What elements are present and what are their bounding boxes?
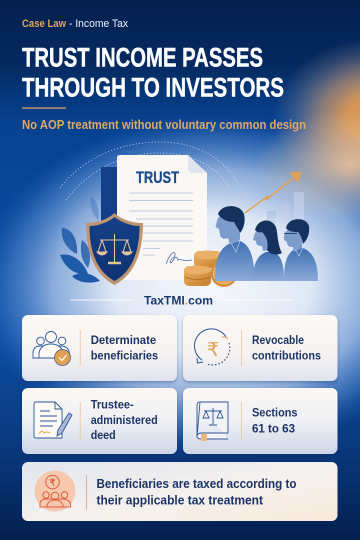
callout: tax treatment <box>22 462 338 521</box>
eyebrow: category label <box>22 18 128 30</box>
icon: rupee over group <box>34 470 76 512</box>
signature <box>166 252 192 264</box>
dotted arcs <box>60 142 238 200</box>
icon: coin stacks <box>184 250 238 287</box>
text: Revocable <box>252 333 304 347</box>
icon: law book <box>197 402 228 441</box>
icon: rupee cycle: ₹ <box>207 340 219 361</box>
text: 61 to 63 <box>252 422 295 436</box>
text: Trustee- <box>91 398 134 412</box>
person 1 <box>215 206 255 281</box>
person 2 <box>253 220 284 281</box>
text <box>91 333 158 362</box>
arrow: growth trend <box>245 172 301 213</box>
icon: document with pen <box>34 402 72 438</box>
document heading: TRUST <box>136 169 179 187</box>
icon: rupee cycle <box>194 329 230 365</box>
title: TRUST INCOME PASSES <box>22 42 263 72</box>
document: trust deed <box>117 155 207 280</box>
icon: rupee over group: ₹ <box>50 478 56 488</box>
icon: leaves <box>60 196 100 283</box>
bar chart: rising bars <box>267 192 304 243</box>
text: Determinate <box>91 333 157 347</box>
panel: trustee-administered deed <box>22 388 177 454</box>
title rule <box>22 108 66 109</box>
people: investors <box>215 206 318 281</box>
text: administered <box>91 413 158 427</box>
panel: sections 61 to 63 <box>183 388 338 454</box>
panel: determinate beneficiaries <box>22 315 177 381</box>
person 3 <box>284 219 318 281</box>
rupee coin <box>210 260 238 287</box>
text <box>252 333 321 362</box>
eyebrow: category label: Case Law <box>22 18 66 30</box>
text <box>252 406 298 436</box>
document back cover <box>101 167 121 227</box>
text: contributions <box>252 348 321 362</box>
title: THROUGH TO INVESTORS <box>22 72 284 102</box>
panel: revocable contributions <box>183 315 338 381</box>
title <box>22 42 284 102</box>
text: Sections <box>252 406 298 420</box>
eyebrow: category label: - Income Tax <box>69 18 128 30</box>
text <box>91 398 158 442</box>
icon: shield with scales <box>86 213 143 285</box>
icon: coin stacks: ₹ <box>220 266 229 282</box>
text: their applicable tax treatment <box>96 493 264 508</box>
icon: group with check <box>33 332 70 366</box>
text: Beneficiaries are taxed according to <box>96 476 297 491</box>
subtitle: No AOP treatment without voluntary common design <box>22 118 306 132</box>
text <box>96 476 297 508</box>
illustration: trust scene <box>60 155 318 287</box>
brand: TaxTMI.com: TaxTMI.com <box>144 294 213 308</box>
text: deed <box>91 428 116 442</box>
text: beneficiaries <box>91 348 158 362</box>
